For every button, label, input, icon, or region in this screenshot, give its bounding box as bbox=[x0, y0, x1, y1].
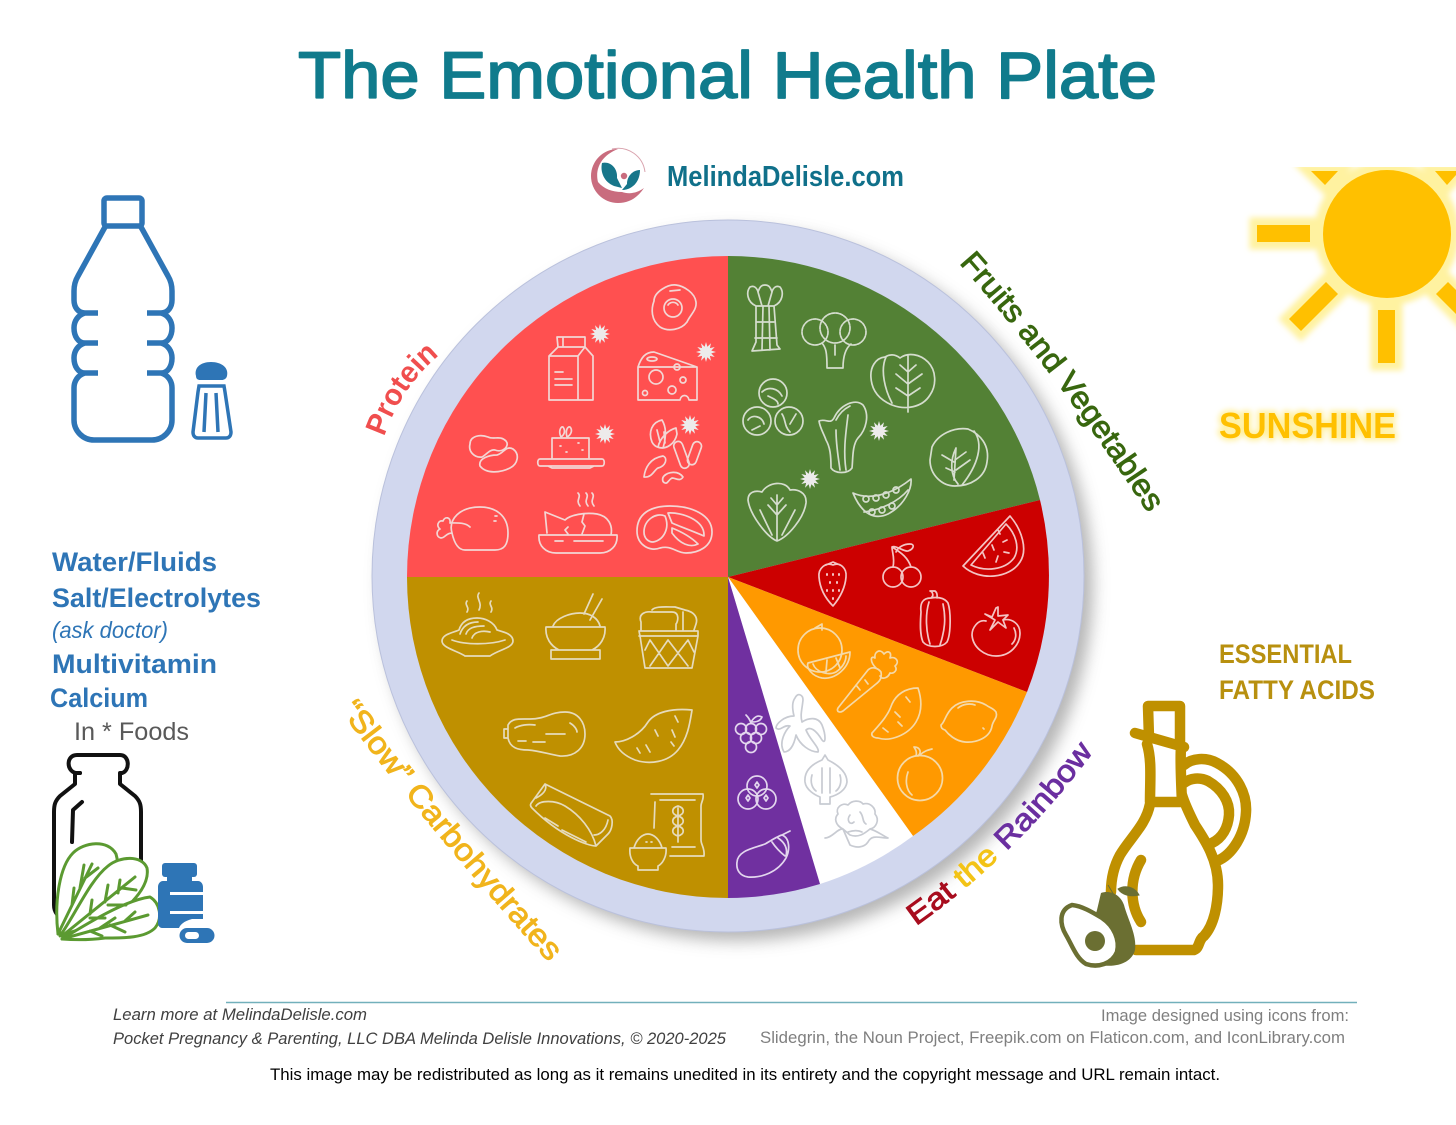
icon: broccoli bbox=[802, 313, 866, 368]
icon: beans bbox=[470, 436, 517, 472]
text: supplements list: Water/Fluids bbox=[52, 547, 217, 577]
slice: red foods bbox=[728, 500, 1049, 692]
logo wordmark: MelindaDelisle.com bbox=[667, 161, 904, 193]
icon: beef dish bbox=[539, 493, 617, 553]
icon: carrot bbox=[837, 651, 897, 712]
icon: strawberry bbox=[819, 562, 846, 606]
icon: avocado bbox=[1061, 885, 1139, 966]
icon: grapes bbox=[736, 715, 766, 752]
slice: vegetables bbox=[728, 256, 1040, 577]
icon: salt shaker bbox=[193, 362, 231, 438]
icon: tomato bbox=[972, 607, 1020, 656]
icon: spinach bbox=[748, 483, 806, 541]
icon: water bottle bbox=[74, 198, 172, 440]
footer: redistribution notice: This image may be redistributed as long as it remains unedited in its entirety and the copyright message and URL remain intact. bbox=[270, 1065, 1220, 1084]
icon: lemon bbox=[941, 701, 996, 742]
icon: logo mark bbox=[591, 148, 645, 203]
slice: orange foods bbox=[728, 577, 1027, 836]
plate shadow bbox=[381, 229, 1093, 941]
text: supplements list: Calcium bbox=[50, 683, 148, 713]
slice: white foods bbox=[728, 577, 913, 884]
icon: cherries bbox=[883, 544, 921, 587]
icon: cabbage bbox=[930, 429, 988, 486]
slice: slow carbohydrates bbox=[407, 577, 728, 898]
icon: steak bbox=[637, 506, 712, 553]
icon: pepper bbox=[920, 591, 950, 646]
icon: peach bbox=[898, 747, 942, 800]
icon: sweet potato bbox=[872, 688, 921, 739]
icon: noodles bbox=[442, 593, 513, 656]
icon: sun bbox=[1257, 168, 1456, 363]
text: essential fatty acids bbox=[1219, 639, 1375, 705]
footer: icon credits heading: Image designed using icons from: bbox=[1101, 1006, 1349, 1025]
icon: cauliflower bbox=[825, 801, 888, 847]
icon: asparagus bbox=[748, 285, 782, 351]
icon: watermelon bbox=[963, 516, 1024, 576]
icon: orange bbox=[798, 624, 850, 678]
icon: flour bag and bowl bbox=[630, 794, 704, 870]
text: essential fatty acids: FATTY ACIDS bbox=[1219, 675, 1375, 705]
icon: banana bbox=[776, 695, 825, 752]
icon: oil jar bbox=[1111, 706, 1246, 950]
icon: rice bowl bbox=[546, 594, 605, 659]
footer: icon credits: Slidegrin, the Noun Project, Freepik.com on Flaticon.com, and IconLibrary.com bbox=[760, 1028, 1345, 1047]
text: supplements list: (ask doctor) bbox=[52, 617, 168, 643]
icon: burrito bbox=[530, 784, 612, 846]
icon: peas bbox=[853, 479, 911, 516]
icon: spinach leaves bbox=[57, 844, 160, 940]
text: sunshine: SUNSHINE bbox=[1219, 405, 1396, 446]
footer: copyright: Pocket Pregnancy & Parenting, LLC DBA Melinda Delisle Innovations, © 2020-2025 bbox=[113, 1029, 727, 1048]
icon: vitamin bottle bbox=[158, 863, 215, 943]
icon: egg bbox=[652, 285, 696, 330]
icon: almonds and cashews bbox=[644, 420, 703, 483]
icon: bread basket bbox=[639, 607, 698, 668]
text: supplements list: Salt/Electrolytes bbox=[52, 583, 261, 613]
text: supplements list bbox=[50, 547, 261, 713]
label: slow carbohydrates: “Slow” Carbohydrates bbox=[350, 698, 559, 960]
text: supplements list: Multivitamin bbox=[52, 649, 217, 679]
icon: lettuce bbox=[871, 355, 935, 412]
text: in foods: In * Foods bbox=[74, 718, 189, 746]
icon: whole chicken bbox=[437, 507, 508, 550]
icon: bok choy bbox=[819, 402, 867, 472]
icon: tofu bbox=[538, 427, 604, 468]
icon: milk bottle bbox=[54, 755, 141, 919]
icon: blueberries bbox=[738, 776, 776, 809]
text: essential fatty acids: ESSENTIAL bbox=[1219, 639, 1352, 669]
title: The Emotional Health Plate bbox=[298, 38, 1157, 112]
label: eat the rainbow: Eat the Rainbow bbox=[906, 741, 1091, 926]
logo: MelindaDelisle.com bbox=[591, 148, 904, 203]
icon: sweet potato bbox=[615, 710, 692, 762]
icon: calcium stars in protein bbox=[590, 324, 716, 444]
footer bbox=[113, 1002, 1357, 1084]
icon: cheese bbox=[638, 352, 697, 400]
slice: purple foods bbox=[728, 577, 820, 898]
icon: milk carton bbox=[549, 337, 593, 400]
icon: eggplant bbox=[737, 831, 790, 877]
icon: stars in vegetables bbox=[800, 421, 889, 489]
plate bbox=[372, 220, 1093, 941]
footer: learn more: Learn more at MelindaDelisle.com bbox=[113, 1005, 367, 1024]
slice: protein bbox=[407, 256, 728, 577]
plate rim bbox=[372, 220, 1084, 932]
icon: onion bbox=[805, 755, 847, 804]
icon: brussels sprouts bbox=[743, 379, 803, 435]
icon: butternut squash bbox=[504, 712, 585, 756]
label: fruits and vegetables: Fruits and Vegetables bbox=[960, 250, 1160, 511]
text: sunshine: SUNSHINE bbox=[1219, 405, 1396, 446]
label: protein: Protein bbox=[366, 346, 438, 435]
